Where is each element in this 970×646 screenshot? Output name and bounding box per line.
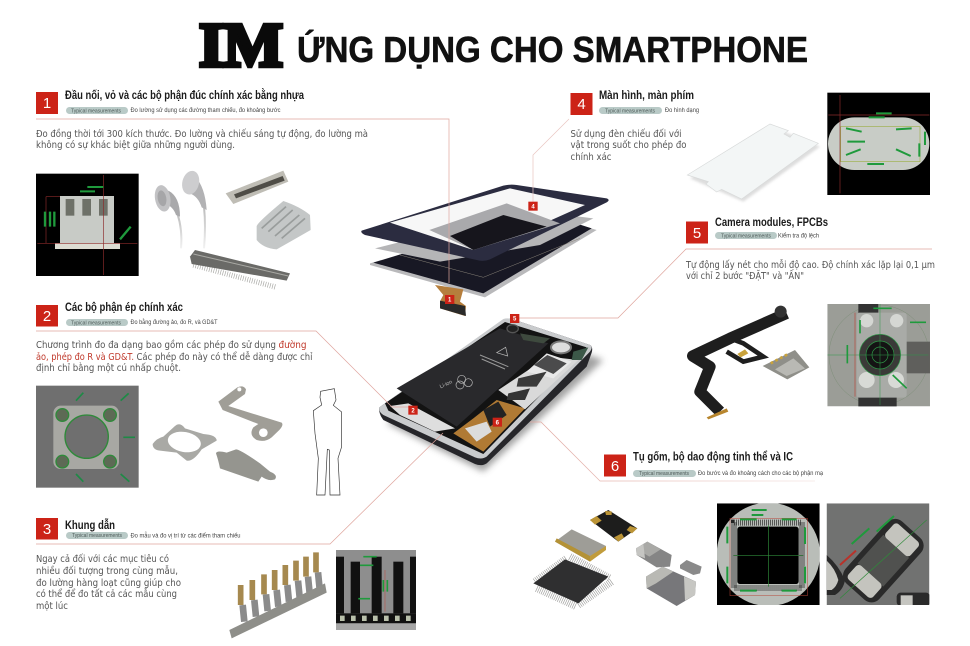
- panel 5: camera modules and FPCBs: [685, 217, 935, 419]
- phone callout markers: 6: [496, 420, 500, 426]
- typical measurements 3: Đo mẫu và đo vị trí từ các điểm tham chiếu: [130, 530, 241, 540]
- typical measurements 1: [66, 105, 281, 114]
- body text 1: Đo đồng thời tới 300 kích thước. Đo lường và chiếu sáng tự động, đo lường mà: [36, 129, 368, 140]
- typical measurements 5: Kiểm tra độ lệch: [778, 232, 819, 240]
- panel 3: lead frames: [36, 518, 416, 638]
- body text 5: với chỉ 2 bước "ĐẶT" và "ẤN": [686, 270, 804, 282]
- badge 3: [36, 518, 58, 540]
- typical measurements 5: [715, 232, 819, 240]
- typical measurements 4: [599, 107, 699, 114]
- heading 4: Màn hình, màn phím: [599, 90, 694, 102]
- heading 6: Tụ gốm, bộ dao động tinh thể và IC: [633, 452, 793, 464]
- typical measurements 1: Typical measurements: [71, 108, 122, 114]
- body text 5: Tự động lấy nét cho mỗi độ cao. Độ chính xác lặp lại 0,1 μm: [685, 260, 935, 271]
- body text 2: đường: [278, 340, 307, 351]
- typical measurements 6: Đo bước và đo khoảng cách cho các bộ phận mạ: [698, 470, 823, 477]
- panel 1: connectors and moulded parts: [36, 89, 368, 287]
- phone body: [379, 318, 603, 472]
- panel 6: ceramic capacitors, crystal oscillators and ICs: [533, 452, 930, 607]
- body text 4: chính xác: [570, 152, 612, 163]
- typical measurements 1: Đo lường sử dụng các đường tham chiếu, đo khoảng bước: [130, 105, 281, 114]
- parts photo 2: stamped plates: [153, 386, 282, 482]
- body text 4: vật trong suốt cho phép đo: [570, 140, 687, 151]
- parts photo 4: glass panel: [687, 124, 820, 202]
- body text 1: không có sự khác biệt giữa những người dùng.: [36, 140, 235, 151]
- phone callout markers: 5: [513, 317, 517, 323]
- measurement image 2: [36, 386, 139, 488]
- measurement image 1: [36, 174, 139, 276]
- body text 3: có thể để đo tất cả các mẫu cùng: [36, 589, 177, 600]
- heading 2: Các bộ phận ép chính xác: [65, 302, 183, 314]
- typical measurements 2: [66, 317, 218, 326]
- display stack: [361, 185, 609, 316]
- measurement image 5: [827, 304, 930, 407]
- typical measurements 4: Typical measurements: [605, 108, 656, 114]
- badge 6: 6: [611, 458, 619, 475]
- body text 3: Ngay cả đối với các mục tiêu có: [36, 554, 169, 565]
- phone callout markers: 2: [411, 408, 415, 414]
- typical measurements 3: [66, 530, 241, 540]
- badge 6: [604, 454, 626, 476]
- parts photo 1: earphones and connectors: [153, 169, 311, 287]
- body text 2: ảo, phép đo R và GD&T.: [36, 352, 134, 363]
- phone body: Li-ion: [439, 379, 453, 390]
- badge 5: [686, 222, 708, 244]
- badge 2: 2: [43, 308, 51, 325]
- heading 3: Khung dẫn: [65, 519, 115, 532]
- badge 2: [36, 305, 58, 326]
- exploded smartphone illustration: [361, 185, 609, 472]
- badge 1: [36, 92, 58, 114]
- typical measurements 6: [633, 470, 823, 477]
- measurement image 6b: capacitor: [827, 503, 930, 607]
- typical measurements 3: Typical measurements: [72, 533, 122, 539]
- measurement image 4: [827, 93, 930, 195]
- measurement image 3: [336, 550, 416, 630]
- phone callout markers: [408, 202, 538, 427]
- parts photo 5: flex cable and module: [693, 306, 809, 419]
- panel 4: screens and keypads: [570, 90, 930, 202]
- heading 5: Camera modules, FPCBs: [715, 217, 828, 229]
- typical measurements 2: Typical measurements: [71, 320, 122, 326]
- body text 4: Sử dụng đèn chiếu đối với: [570, 129, 682, 140]
- measurement image 6a: IC package: [717, 503, 820, 606]
- typical measurements 5: Typical measurements: [721, 234, 772, 240]
- body text 2: Các phép đo này có thể dễ dàng được chỉ: [136, 352, 313, 363]
- typical measurements 2: Đo bằng đường ảo, đo R, và GD&T: [130, 317, 218, 326]
- badge 3: 3: [43, 521, 51, 538]
- title: IM: [199, 12, 283, 80]
- icon: human silhouette for scale: [313, 389, 342, 495]
- phone callout markers: 1: [448, 298, 452, 304]
- body text 2: định chỉ bằng một cú nhấp chuột.: [36, 363, 181, 374]
- parts photo 6: crystals, IC and capacitors: [533, 510, 702, 607]
- body text 3: nhiều đối tượng trong cùng mẫu,: [36, 566, 178, 577]
- phone callout markers: 4: [531, 204, 535, 210]
- typical measurements 6: Typical measurements: [639, 471, 690, 477]
- badge 4: 4: [577, 96, 586, 113]
- body text 3: đo lường hàng loạt cũng giúp cho: [36, 578, 181, 589]
- leader lines: [36, 119, 932, 544]
- body text 3: một lúc: [36, 601, 68, 612]
- panel 2: precision stamped parts: [36, 302, 342, 495]
- body text 2: Chương trình đo đa dạng bao gồm các phép đo sử dụng: [36, 340, 276, 351]
- parts photo 3: lead frame strip: [229, 552, 327, 638]
- title: [199, 12, 808, 80]
- badge 4: [570, 93, 592, 115]
- badge 1: 1: [43, 95, 51, 112]
- title: ỨNG DỤNG CHO SMARTPHONE: [297, 28, 808, 70]
- typical measurements 4: Đo hình dạng: [665, 107, 699, 114]
- badge 5: 5: [693, 225, 701, 242]
- heading 1: Đầu nối, vỏ và các bộ phận đúc chính xác bằng nhựa: [65, 89, 304, 102]
